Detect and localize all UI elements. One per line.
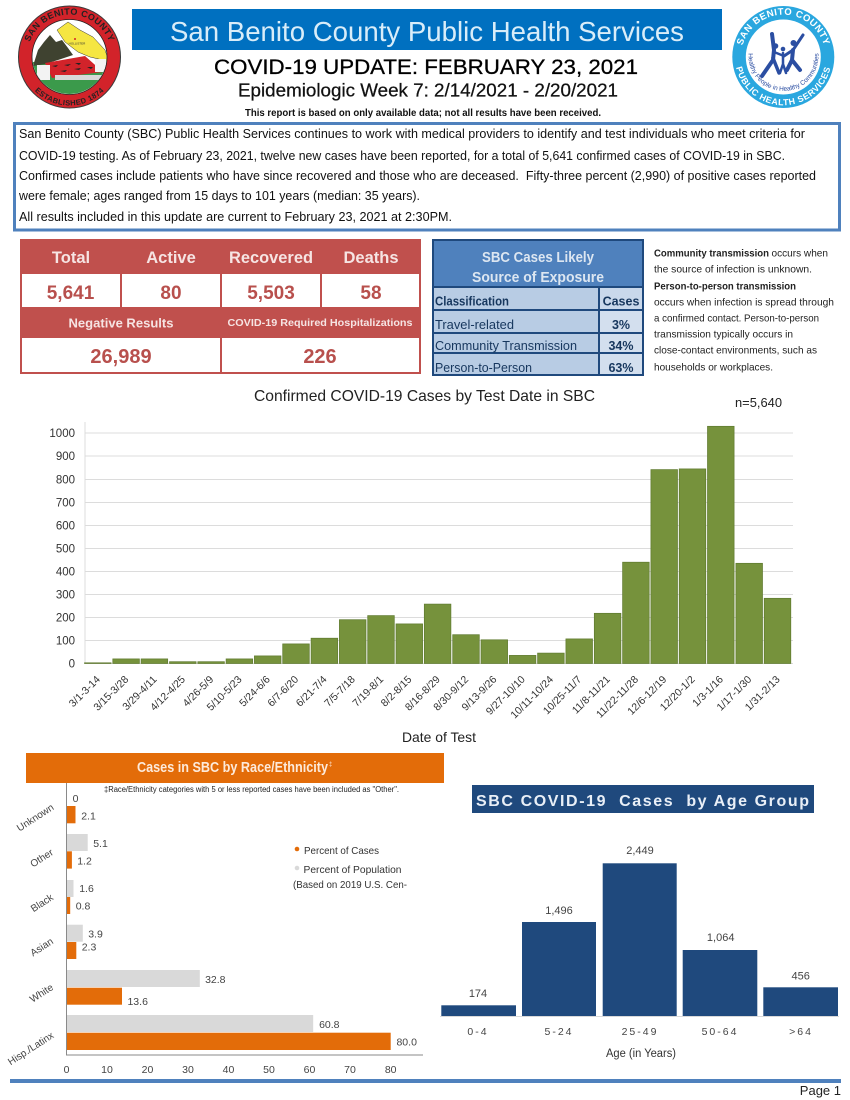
bar chart: race/ethnicity: 32.8 [205, 974, 226, 986]
panel: case totals table: Deaths [343, 249, 399, 267]
bar chart: cases by test date: 1/31-2/13 [743, 674, 783, 713]
bar chart: cases by test date: 6/21-7/4 [294, 674, 330, 709]
report title: COVID-19 UPDATE: FEBRUARY 23, 2021 [214, 55, 638, 79]
bar chart: cases by test date: 5/10-5/23 [205, 674, 245, 713]
heading: cases by race/ethnicity: ‡ [329, 762, 332, 768]
panel: likely source of exposure table [432, 239, 644, 376]
bar chart: cases by test date: 7/19-8/1 [350, 674, 386, 709]
bar chart: cases by age group: 2,449 [626, 845, 654, 857]
bar chart: race/ethnicity: Hisp./Latinx [6, 1030, 56, 1068]
bar chart: race/ethnicity: 1.2 [77, 856, 92, 868]
bar chart: cases by test date: 1/17-1/30 [714, 674, 754, 713]
bar chart: race/ethnicity: 1.6 [79, 883, 94, 895]
bar chart: race/ethnicity: 20 [142, 1064, 153, 1076]
panel: case totals table: 226 [303, 346, 337, 368]
panel: case totals table [20, 239, 421, 374]
logo: Public Health Services: SAN BENITO COUNTY [736, 8, 830, 45]
bar chart: race/ethnicity: White [28, 982, 56, 1005]
panel: likely source of exposure table: Cases [603, 294, 639, 308]
transmission definitions text: a confirmed contact. Person-to-person [654, 312, 819, 324]
bar chart: cases by age group: 1,064 [707, 932, 734, 944]
bar chart: cases by test date: 11/8-11/21 [570, 674, 613, 717]
transmission definitions text: the source of infection is unknown. [654, 264, 812, 276]
bar chart: race/ethnicity: 80 [385, 1064, 397, 1076]
bar chart: cases by test date: 12/20-1/2 [658, 674, 698, 713]
logo: Public Health Services [732, 6, 834, 108]
panel: case totals table: Active [146, 249, 196, 267]
bar chart: race/ethnicity: 80.0 [396, 1036, 417, 1048]
bar chart: cases by age group: Age (in Years) [606, 1048, 676, 1060]
x-axis title: date of test: Date of Test [402, 729, 476, 745]
bar chart: cases by age group: 174 [469, 988, 487, 1000]
panel: likely source of exposure table: Travel-related [435, 317, 514, 332]
heading: cases by race/ethnicity: Cases in SBC by Race/Ethnicity [137, 760, 328, 776]
race/ethnicity footnote: ‡Race/Ethnicity categories with 5 or less reported cases have been included as "Other". [104, 785, 399, 794]
panel: summary text: were female; ages ranged from 15 days to 101 years (median: 35 years). [18, 189, 420, 203]
bar chart: race/ethnicity: 60 [304, 1064, 315, 1076]
transmission definitions text: Person-to-person transmission [654, 280, 796, 292]
footer rule [10, 1079, 841, 1083]
bar chart: cases by test date: 300 [56, 590, 75, 602]
legend: race/ethnicity chart [293, 845, 407, 891]
page number: Page 1 [800, 1083, 841, 1098]
bar chart: cases by age group: 1,496 [545, 905, 573, 917]
panel: summary text: All results included in this update are current to February 23, 2021 at 2:30PM. [19, 210, 452, 224]
bar chart: cases by test date: 8/30-9/12 [431, 674, 471, 713]
logo: Public Health Services: Healthy People in Healthy Communities [748, 54, 818, 91]
bar chart: cases by test date: 100 [56, 636, 75, 648]
bar chart: race/ethnicity: 30 [182, 1064, 194, 1076]
panel: case totals table: 5,503 [247, 283, 295, 304]
bar chart: cases by test date: 8/16-8/29 [403, 674, 443, 713]
bar chart: cases by age group [440, 845, 839, 1060]
panel: summary text: Confirmed cases include patients who have since recovered and those who are deceased. Fifty-three percent (2,990) of positive cases reported [19, 169, 816, 183]
bar chart: cases by test date: 1/3-1/16 [690, 674, 726, 709]
panel: likely source of exposure table: 3% [612, 318, 630, 332]
logo: San Benito County seal [18, 6, 121, 108]
panel: case totals table: COVID-19 Required Hospitalizations [228, 317, 413, 329]
transmission definitions text: households or workplaces. [654, 362, 773, 374]
bar chart: cases by test date [49, 422, 793, 721]
panel: case totals table: 26,989 [90, 346, 152, 368]
data availability note: This report is based on only available data; not all results have been received. [245, 108, 601, 119]
panel: case totals table: 5,641 [47, 283, 95, 304]
transmission definitions text: transmission typically occurs in [654, 328, 793, 340]
bar chart: cases by test date: 800 [56, 474, 75, 486]
bar chart: cases by test date: 5/24-6/6 [237, 674, 273, 709]
bar chart: cases by age group: 5-24 [544, 1026, 574, 1038]
bar chart: race/ethnicity: 5.1 [93, 838, 108, 850]
bar chart: race/ethnicity: 10 [101, 1064, 113, 1076]
bar chart: cases by age group: 50-64 [702, 1026, 738, 1038]
bar chart: race/ethnicity: 60.8 [319, 1019, 340, 1031]
bar chart: race/ethnicity: 2.3 [82, 942, 96, 954]
bar chart: race/ethnicity [6, 783, 423, 1076]
bar chart: cases by test date: 6/7-6/20 [265, 674, 301, 709]
bar chart: cases by test date: 10/11-10/24 [508, 674, 556, 721]
bar chart: cases by test date: 600 [56, 520, 75, 532]
logo: San Benito County seal: SAN BENITO COUNTY [24, 8, 115, 42]
bar chart: race/ethnicity: 0 [73, 793, 79, 805]
legend: race/ethnicity chart: Percent of Cases [304, 845, 379, 857]
bar chart: race/ethnicity: Black [29, 892, 56, 915]
sample size label: n=5,640 [735, 395, 782, 410]
bar chart: race/ethnicity: 0.8 [76, 900, 90, 912]
panel: case totals table: 58 [360, 283, 382, 304]
panel: case totals table: 80 [160, 283, 182, 304]
header banner: San Benito County Public Health Services [170, 16, 684, 47]
bar chart: cases by test date: 400 [56, 566, 75, 578]
bar chart: cases by test date: 4/12-4/25 [148, 674, 188, 713]
bar chart: cases by test date: 9/27-10/10 [484, 674, 528, 718]
bar chart: cases by test date: 500 [56, 544, 75, 556]
transmission definitions text: occurs when infection is spread through [654, 296, 834, 308]
bar chart: cases by test date: 7/5-7/18 [322, 674, 358, 709]
bar chart: race/ethnicity: 13.6 [127, 996, 148, 1008]
panel: case totals table: Negative Results [68, 316, 174, 330]
transmission definitions text: close-contact environments, such as [654, 344, 817, 356]
bar chart: cases by age group: 456 [792, 971, 810, 983]
transmission definitions text: Community transmission [654, 248, 769, 260]
bar chart: cases by test date: 0 [69, 658, 75, 670]
heading: cases by age group: SBC COVID-19 Cases by Age Group [476, 793, 809, 810]
bar chart: cases by test date: 11/22-11/28 [594, 674, 641, 721]
logo: San Benito County seal: ESTABLISHED 1874 [35, 87, 104, 106]
panel: summary text [14, 124, 840, 230]
panel: likely source of exposure table: Community Transmission [435, 338, 577, 353]
bar chart: race/ethnicity: 0 [64, 1064, 70, 1076]
panel: case totals table: Total [52, 249, 90, 267]
panel: likely source of exposure table: 34% [608, 339, 634, 353]
bar chart: cases by test date: 9/13-9/26 [460, 674, 500, 713]
bar chart: cases by age group: 25-49 [622, 1026, 658, 1038]
bar chart: cases by test date: 3/1-3-14 [67, 674, 103, 710]
bar chart: race/ethnicity: 2.1 [81, 810, 96, 822]
transmission definitions text: occurs when [772, 248, 828, 260]
bar chart: race/ethnicity: 3.9 [88, 928, 103, 940]
panel: likely source of exposure table: Person-to-Person [435, 360, 532, 375]
bar chart: race/ethnicity: 70 [344, 1064, 356, 1076]
bar chart: cases by test date: 8/2-8/15 [379, 674, 415, 709]
panel: summary text: COVID-19 testing. As of February 23, 2021, twelve new cases have been reported, for a total of 5,641 confirmed cases of COVID-19 in SBC. [19, 149, 785, 163]
transmission definitions text [654, 248, 834, 374]
panel: case totals table: Recovered [229, 249, 313, 267]
legend: race/ethnicity chart: Percent of Population [304, 864, 402, 876]
chart title: confirmed cases by test date: Confirmed COVID-19 Cases by Test Date in SBC [254, 388, 595, 405]
bar chart: cases by age group: 0-4 [467, 1026, 489, 1038]
bar chart: cases by test date: 1000 [49, 428, 75, 440]
panel: summary text: San Benito County (SBC) Public Health Services continues to work with medical providers to identify and test individuals who meet criteria for [19, 127, 805, 141]
logo: Public Health Services: PUBLIC HEALTH SERVICES [736, 66, 830, 106]
bar chart: cases by test date: 700 [56, 498, 75, 510]
bar chart: race/ethnicity: Unknown [15, 802, 56, 834]
legend: race/ethnicity chart: (Based on 2019 U.S. Cen- [293, 879, 407, 891]
bar chart: cases by test date: 200 [56, 612, 75, 624]
bar chart: race/ethnicity: Asian [29, 936, 56, 959]
bar chart: cases by test date: 3/15-3/28 [91, 674, 131, 713]
heading: cases by age group [472, 785, 814, 813]
heading: cases by race/ethnicity [26, 753, 444, 783]
panel: likely source of exposure table: SBC Cases Likely [482, 250, 594, 266]
bar chart: cases by test date: 10/25-11/7 [541, 674, 584, 717]
bar chart: cases by age group: >64 [789, 1026, 813, 1038]
bar chart: race/ethnicity: Other [29, 847, 56, 870]
panel: likely source of exposure table: Source of Exposure [472, 270, 604, 286]
panel: likely source of exposure table: 63% [608, 361, 634, 375]
bar chart: cases by test date: 3/29-4/11 [120, 674, 160, 713]
header banner [132, 9, 722, 50]
bar chart: cases by test date: 900 [56, 451, 75, 463]
bar chart: race/ethnicity: 40 [223, 1064, 234, 1076]
bar chart: cases by test date: 12/6-12/19 [625, 674, 669, 718]
panel: likely source of exposure table: Classification [435, 294, 509, 308]
bar chart: cases by test date: 4/26-5/9 [180, 674, 216, 709]
logo: San Benito County seal: HOLLISTER [69, 42, 86, 46]
bar chart: race/ethnicity: 50 [263, 1064, 275, 1076]
epidemiologic week subtitle: Epidemiologic Week 7: 2/14/2021 - 2/20/2021 [238, 81, 618, 101]
